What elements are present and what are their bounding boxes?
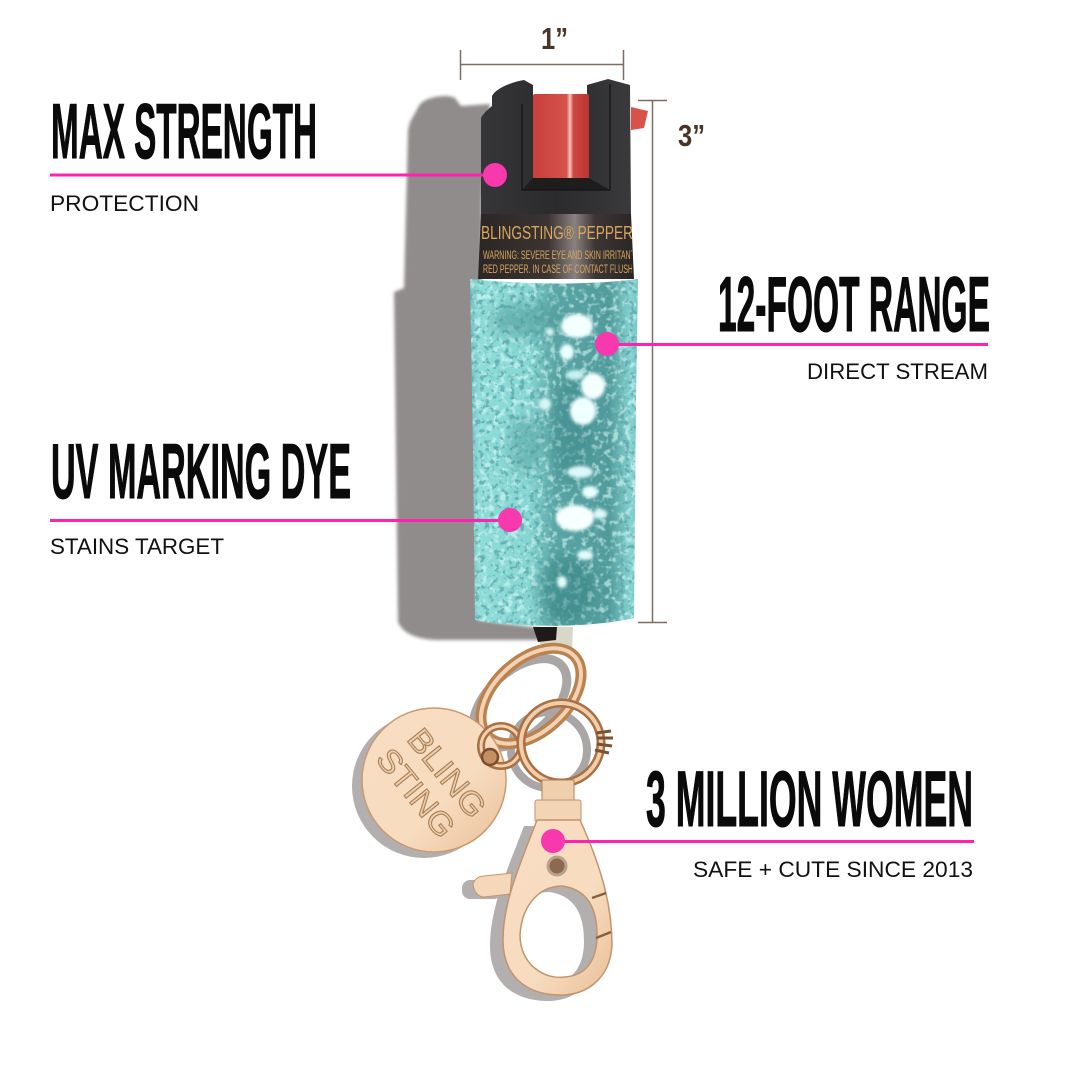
label band: RED PEPPER. IN CASE OF CONTACT FLUSH <box>483 264 633 276</box>
round charm with logo: STING <box>369 741 463 845</box>
callout: uv marking dye <box>50 427 522 559</box>
jump ring <box>481 726 521 766</box>
callout: uv marking dye: UV MARKING DYE <box>51 427 351 515</box>
glitter sleeve <box>465 275 645 630</box>
lobster clasp <box>473 780 612 995</box>
callout: 3 million women <box>541 754 974 882</box>
callout: 3 million women: SAFE + CUTE SINCE 2013 <box>693 857 973 882</box>
keychain hardware <box>362 627 613 995</box>
safety tab <box>631 107 648 130</box>
cap notch edges <box>522 84 610 190</box>
pepper spray bottle <box>465 79 648 630</box>
label band: BLINGSTING® PEPPER <box>481 222 633 243</box>
callout: max strength <box>50 87 507 216</box>
swivel ring <box>521 703 613 783</box>
hardware shadows <box>352 642 599 1001</box>
red actuator <box>522 94 610 190</box>
dimension: height 3 inches <box>638 100 705 622</box>
strap connector <box>533 627 573 654</box>
callout: max strength: PROTECTION <box>50 191 199 216</box>
callout: max strength: MAX STRENGTH <box>51 87 317 175</box>
dimension: height 3 inches: 3” <box>678 118 705 153</box>
callout: 12-foot range <box>595 260 990 384</box>
callout: uv marking dye: STAINS TARGET <box>50 534 224 559</box>
label band <box>478 214 635 279</box>
round charm with logo <box>362 708 506 852</box>
split ring <box>463 630 599 762</box>
dimension: width 1 inch: 1” <box>541 21 568 56</box>
label band: WARNING: SEVERE EYE AND SKIN IRRITANT <box>483 250 635 262</box>
bottle shadow <box>394 96 540 640</box>
black cap <box>481 79 631 214</box>
callout: 12-foot range: DIRECT STREAM <box>807 359 988 384</box>
dimension: width 1 inch <box>460 21 624 80</box>
round charm with logo: BLING <box>400 721 494 825</box>
